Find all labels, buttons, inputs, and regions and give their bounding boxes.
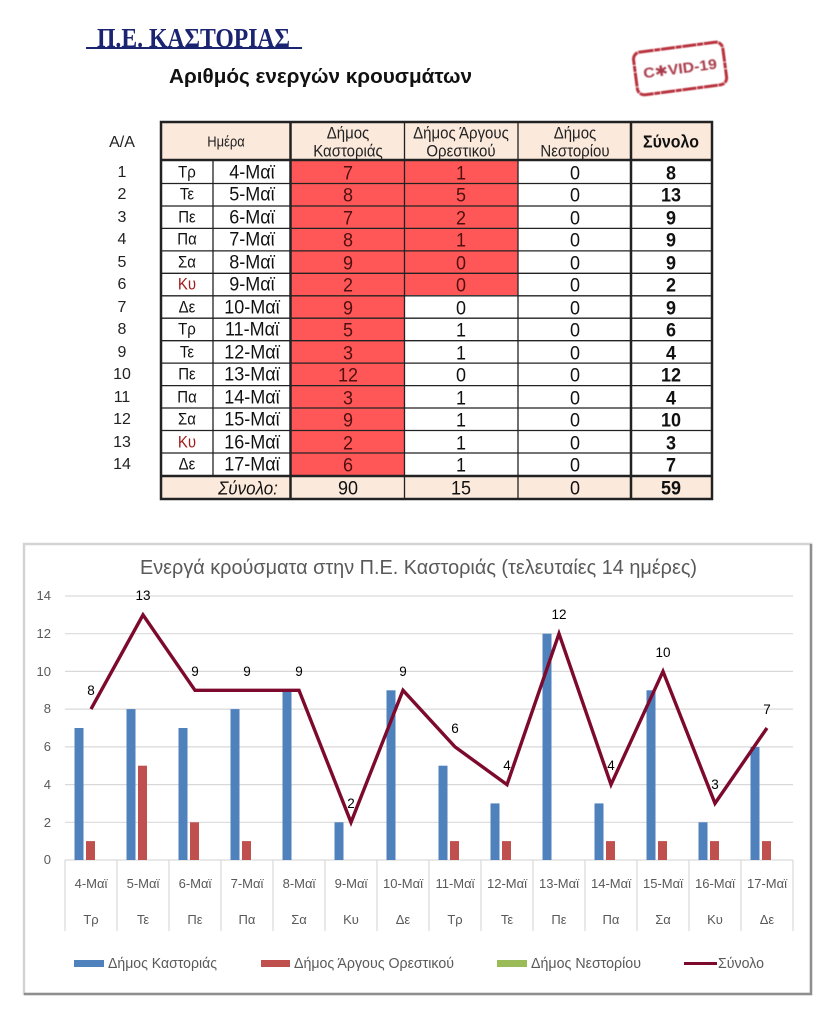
- table rows: Σα: [178, 254, 196, 272]
- row numbers column: 2: [118, 186, 127, 203]
- row numbers column: [109, 134, 135, 473]
- table rows: 0: [456, 275, 466, 297]
- x axis weekday labels: Τε: [501, 912, 513, 927]
- legend: Δήμος Νεστορίου: [531, 956, 641, 972]
- table rows: 0: [456, 253, 466, 275]
- table rows: 3: [343, 388, 353, 410]
- x axis date labels: 4-Μαϊ: [75, 876, 109, 891]
- table rows: 1: [456, 433, 466, 455]
- table rows: 17-Μαϊ: [224, 454, 280, 476]
- row numbers column: 13: [113, 434, 131, 451]
- y axis labels: 10: [37, 664, 51, 679]
- line data labels: 2: [347, 796, 355, 811]
- row numbers column: 12: [113, 411, 131, 428]
- x axis weekday labels: Σα: [291, 912, 307, 927]
- x axis date labels: 11-Μαϊ: [435, 876, 476, 891]
- bars: Δήμος Καστοριάς: [74, 634, 760, 860]
- table rows: 8: [343, 185, 353, 207]
- bars: Δήμος Άργους Ορεστικού: [86, 766, 771, 860]
- y axis labels: 2: [44, 815, 51, 830]
- legend: Δήμος Άργους Ορεστικού: [294, 956, 454, 972]
- row numbers column: 14: [113, 456, 131, 473]
- table rows: Τε: [180, 186, 194, 204]
- table rows: 0: [570, 343, 580, 365]
- table rows: 6-Μαϊ: [229, 207, 275, 229]
- table rows: 7-Μαϊ: [229, 229, 275, 251]
- line data labels: 9: [399, 664, 407, 679]
- table rows: 0: [570, 208, 580, 230]
- line data labels: 8: [87, 683, 95, 698]
- gridlines: [65, 596, 793, 931]
- table rows: Πε: [178, 209, 196, 227]
- x axis weekday labels: Πε: [187, 912, 203, 927]
- totals row: Σύνολο:: [217, 478, 278, 499]
- x axis date labels: [75, 876, 788, 891]
- table rows: 0: [570, 185, 580, 207]
- table rows: 9: [666, 230, 676, 252]
- totals row: 90: [338, 478, 358, 500]
- line data labels: 4: [503, 758, 511, 773]
- table rows: 11-Μαϊ: [225, 319, 280, 341]
- totals row: 0: [570, 478, 580, 500]
- row numbers column: 8: [118, 321, 127, 338]
- table rows: 1: [456, 343, 466, 365]
- line data labels: 12: [551, 607, 567, 622]
- x axis weekday labels: Πα: [239, 912, 256, 927]
- table rows: 0: [570, 410, 580, 432]
- table rows: 3: [343, 343, 353, 365]
- table rows: Τρ: [178, 321, 196, 339]
- table rows: 1: [456, 230, 466, 252]
- y axis labels: 14: [37, 588, 51, 603]
- x axis date labels: 5-Μαϊ: [127, 876, 161, 891]
- y axis labels: 4: [44, 777, 51, 792]
- x axis date labels: 14-Μαϊ: [591, 876, 632, 891]
- line: Σύνολο: [91, 615, 767, 822]
- table rows: 0: [570, 388, 580, 410]
- line data labels: 9: [295, 664, 303, 679]
- table rows: 4: [666, 343, 676, 365]
- row numbers column: 5: [118, 254, 127, 271]
- table rows: 0: [570, 253, 580, 275]
- row numbers column: 3: [118, 209, 127, 226]
- table rows: 12: [338, 365, 358, 387]
- x axis weekday labels: Κυ: [343, 912, 359, 927]
- line data labels: 3: [711, 777, 719, 792]
- table rows: 8: [343, 230, 353, 252]
- line data labels: 10: [655, 645, 671, 660]
- table rows: 16-Μαϊ: [224, 432, 280, 454]
- row numbers column: 4: [118, 231, 127, 248]
- table rows: 8: [666, 163, 676, 185]
- table: active cases per municipality: [161, 122, 712, 500]
- totals row: 15: [451, 478, 471, 500]
- table rows: 6: [666, 320, 676, 342]
- x axis date labels: 6-Μαϊ: [179, 876, 213, 891]
- table rows: Σα: [178, 411, 196, 429]
- table rows: Πε: [178, 366, 196, 384]
- table rows: 13-Μαϊ: [224, 364, 280, 386]
- x axis weekday labels: Σα: [655, 912, 671, 927]
- table rows: [177, 162, 681, 477]
- table rows: 1: [456, 320, 466, 342]
- table rows: 13: [661, 185, 681, 207]
- table rows: 0: [570, 298, 580, 320]
- table rows: 1: [456, 388, 466, 410]
- table rows: 0: [456, 365, 466, 387]
- table rows: 0: [570, 230, 580, 252]
- row numbers column: 1: [118, 164, 127, 181]
- table rows: 0: [570, 163, 580, 185]
- header cells: Δήμος Άργους: [413, 125, 509, 143]
- legend: Δήμος Καστοριάς: [108, 956, 217, 972]
- row numbers column: 6: [118, 276, 127, 293]
- totals row: 59: [661, 478, 681, 500]
- table rows: 4: [666, 388, 676, 410]
- x axis weekday labels: [83, 912, 774, 927]
- table rows: 0: [570, 365, 580, 387]
- x axis weekday labels: Κυ: [707, 912, 723, 927]
- x axis weekday labels: Τε: [137, 912, 149, 927]
- icon: covid-19 stamp: [633, 41, 727, 96]
- table rows: 10-Μαϊ: [224, 297, 280, 319]
- table rows: 1: [456, 455, 466, 477]
- line data labels: 13: [135, 588, 151, 603]
- y axis labels: 0: [44, 852, 51, 867]
- table rows: Πα: [177, 389, 197, 407]
- row numbers column: 9: [118, 344, 127, 361]
- table rows: Τρ: [178, 164, 196, 182]
- table rows: 5-Μαϊ: [229, 184, 275, 206]
- table rows: 9-Μαϊ: [229, 274, 275, 296]
- table rows: 12-Μαϊ: [224, 342, 280, 364]
- table rows: 8-Μαϊ: [229, 252, 275, 274]
- x axis date labels: 8-Μαϊ: [283, 876, 317, 891]
- line data labels: 9: [243, 664, 251, 679]
- x axis date labels: 16-Μαϊ: [695, 876, 736, 891]
- header cells: Νεστορίου: [540, 143, 610, 161]
- table rows: Πα: [177, 231, 197, 249]
- table rows: 2: [343, 433, 353, 455]
- y axis labels: 8: [44, 701, 51, 716]
- line data labels: 9: [191, 664, 199, 679]
- table rows: 7: [343, 163, 353, 185]
- header cells: Σύνολο: [643, 132, 699, 152]
- table rows: 9: [666, 298, 676, 320]
- x axis date labels: 12-Μαϊ: [487, 876, 528, 891]
- x axis weekday labels: Δε: [760, 912, 774, 927]
- table rows: 5: [456, 185, 466, 207]
- line data labels: 6: [451, 721, 459, 736]
- red highlighted cells: [291, 161, 518, 476]
- table rows: 15-Μαϊ: [224, 409, 280, 431]
- table rows: 0: [570, 320, 580, 342]
- row numbers column: 10: [113, 366, 131, 383]
- table rows: Δε: [179, 456, 195, 474]
- table rows: 9: [343, 298, 353, 320]
- table grid: [161, 122, 712, 499]
- row numbers column: Α/Α: [109, 134, 135, 151]
- x axis weekday labels: Πε: [551, 912, 567, 927]
- x axis date labels: 15-Μαϊ: [643, 876, 684, 891]
- x axis weekday labels: Δε: [396, 912, 410, 927]
- x axis date labels: 7-Μαϊ: [231, 876, 265, 891]
- header cells: Ημέρα: [207, 134, 245, 150]
- table rows: 9: [343, 410, 353, 432]
- x axis date labels: 9-Μαϊ: [335, 876, 369, 891]
- table rows: Δε: [179, 299, 195, 317]
- table rows: 14-Μαϊ: [224, 387, 280, 409]
- table rows: 3: [666, 433, 676, 455]
- table rows: 7: [666, 455, 676, 477]
- table rows: 5: [343, 320, 353, 342]
- row numbers column: 11: [114, 389, 130, 406]
- table rows: Κυ: [178, 276, 196, 294]
- header cells: Ορεστικού: [426, 143, 496, 161]
- table rows: 9: [666, 208, 676, 230]
- table rows: 0: [570, 433, 580, 455]
- totals row: [217, 478, 681, 500]
- x axis date labels: 17-Μαϊ: [747, 876, 788, 891]
- x axis date labels: 13-Μαϊ: [539, 876, 580, 891]
- table rows: 0: [570, 275, 580, 297]
- y axis labels: [37, 588, 51, 867]
- header cells: Καστοριάς: [313, 143, 383, 161]
- x axis weekday labels: Πα: [603, 912, 620, 927]
- title: regional unit: Π.Ε. ΚΑΣΤΟΡΙΑΣ: [97, 23, 290, 53]
- subtitle: Αριθμός ενεργών κρουσμάτων: [169, 65, 472, 88]
- table rows: 0: [570, 455, 580, 477]
- table rows: 10: [661, 410, 681, 432]
- table header and total background: [161, 122, 712, 499]
- legend: Σύνολο: [718, 956, 764, 972]
- y axis labels: 6: [44, 739, 51, 754]
- table rows: Τε: [180, 344, 194, 362]
- panel: chart: [24, 544, 811, 994]
- chart frame: [24, 544, 811, 994]
- table rows: 9: [666, 253, 676, 275]
- table rows: 7: [343, 208, 353, 230]
- x axis weekday labels: Τρ: [83, 912, 99, 927]
- x axis weekday labels: Τρ: [447, 912, 463, 927]
- y axis labels: 12: [37, 626, 51, 641]
- line data labels: 7: [763, 702, 771, 717]
- table rows: 4-Μαϊ: [229, 162, 275, 184]
- line data labels: 4: [607, 758, 615, 773]
- table rows: 1: [456, 163, 466, 185]
- table rows: 6: [343, 455, 353, 477]
- table rows: Κυ: [178, 434, 196, 452]
- icon: covid-19 stamp: C✱VID-19: [642, 57, 718, 82]
- table rows: 2: [666, 275, 676, 297]
- header cells: [207, 125, 699, 161]
- table rows: 0: [456, 298, 466, 320]
- header cells: Δήμος: [554, 125, 597, 143]
- x axis date labels: 10-Μαϊ: [383, 876, 424, 891]
- table rows: 2: [456, 208, 466, 230]
- legend: [74, 956, 764, 972]
- row numbers column: 7: [118, 299, 127, 316]
- table rows: 9: [343, 253, 353, 275]
- table rows: 1: [456, 410, 466, 432]
- line data labels: [87, 588, 771, 811]
- header cells: Δήμος: [327, 125, 370, 143]
- table rows: 12: [661, 365, 681, 387]
- table rows: 2: [343, 275, 353, 297]
- chart title: Ενεργά κρούσματα στην Π.Ε. Καστοριάς (τελευταίες 14 ημέρες): [140, 557, 697, 579]
